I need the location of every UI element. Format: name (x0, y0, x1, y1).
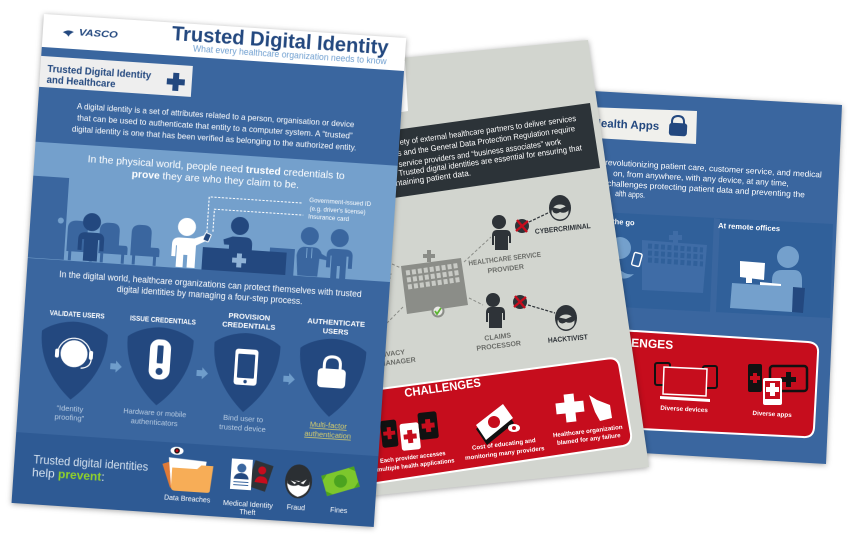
panel: dark intro text: s and the General Data Protection Regulation require (397, 124, 576, 158)
label: healthcare organization blamed (553, 424, 623, 447)
label: medical identity theft: Medical Identity (223, 500, 274, 510)
label: cybercriminal: CYBERCRIMINAL (534, 221, 592, 236)
body text: apps intro: revolutionizing patient care, customer service, and medical (605, 158, 822, 179)
icon: watching eye (170, 446, 184, 455)
section heading: health apps (560, 106, 697, 144)
icon: hospital building (401, 250, 468, 318)
labels: credentials: Insurance card (308, 213, 349, 223)
arrow: step 3 to 4 (283, 373, 295, 385)
illustration: doctor (295, 226, 329, 277)
label: hacktivist: HACKTIVIST (547, 332, 589, 345)
body text: apps intro (605, 158, 822, 200)
label: claims processor (476, 332, 521, 353)
icon: diverse devices (655, 363, 717, 402)
label: healthcare organization blamed: blamed for any failure (557, 432, 622, 447)
illustration: reception desk (201, 247, 287, 275)
panel: dark intro text: service providers and “business associates” work (398, 137, 562, 169)
label: diverse devices: Diverse devices (660, 405, 709, 414)
icon: folder data breaches (161, 457, 214, 493)
step 4: authenticate users: authentication (304, 429, 351, 441)
label: claims processor: PROCESSOR (476, 340, 521, 353)
panel: physical world (28, 142, 398, 282)
icon: claims processor person (486, 293, 505, 328)
icon: fraud mask (284, 464, 313, 499)
step 4: authenticate users: Multi-factor (310, 420, 348, 431)
label: diverse apps: Diverse apps (752, 410, 792, 419)
panel: access scenarios (600, 212, 833, 318)
page 3: health apps sheet (540, 88, 842, 464)
label: privacy manager: PRIVACY (374, 349, 406, 360)
icon: multiple phones (379, 411, 440, 453)
icon: mobile user (609, 237, 642, 279)
icon: hospital (642, 231, 707, 293)
icon: money fines (321, 466, 360, 496)
illustration: door (28, 176, 69, 260)
page 2: healthcare partners sheet (350, 40, 649, 498)
arrow: step 1 to 2 (110, 360, 122, 373)
icon: cybercriminal mask (549, 195, 571, 221)
labels: credentials: (e.g. driver's license) (309, 206, 366, 216)
label: privacy manager: MANAGER (379, 357, 416, 368)
illustration: side cabinet (268, 247, 295, 276)
dashed callouts to credentials (207, 197, 304, 239)
label: fines: Fines (330, 507, 348, 515)
icon: money cost (476, 404, 520, 445)
section heading: health apps: Health Apps (592, 118, 659, 133)
body text: digital identity definition: A digital identity is a set of attributes related to a person, organisation or device (77, 101, 355, 129)
step 2: issue credentials: ISSUE CREDENTIALS (130, 313, 196, 327)
section heading: trusted digital identity and healthcare (39, 56, 193, 97)
arrow: step 2 to 3 (196, 367, 208, 380)
text: help prevent (32, 452, 149, 487)
icon: credential card (203, 232, 211, 242)
label: healthcare organization blamed: Healthcare organization (553, 424, 623, 439)
text: help prevent: Trusted digital identities (33, 452, 149, 474)
step 3: provision credentials: PROVISION (228, 311, 270, 323)
icon: mobile device (233, 348, 259, 386)
icon: hacktivist mask (555, 305, 577, 331)
section heading: trusted digital identity and healthcare: and Healthcare (46, 74, 116, 90)
heading: physical world: In the physical world, people need trusted credentials to (87, 154, 345, 182)
step 3: provision credentials (209, 310, 283, 435)
step 2: issue credentials: Hardware or mobile (123, 406, 187, 419)
heading: challenges: CHALLENGES (590, 334, 674, 352)
scenario label: on the go: the go (612, 217, 635, 227)
body text: apps intro: challenges protecting patient data and preventing the (607, 179, 806, 199)
label: healthcare service provider: PROVIDER (487, 264, 524, 275)
illustration: second visitor (325, 228, 354, 279)
label: cost of educating: monitoring many providers (465, 445, 546, 462)
panel: challenges red box (apps) (540, 325, 818, 437)
subtitle: What every healthcare organization needs to know (193, 43, 387, 66)
illustration: patient presenting credential (171, 217, 209, 269)
icon: headset (54, 337, 94, 369)
step 4: authenticate users: AUTHENTICATE (307, 316, 365, 329)
panel: dark intro text (380, 103, 600, 200)
step 4: authenticate users (294, 316, 368, 441)
label: privacy manager (374, 349, 416, 368)
title: Trusted Digital Identity (171, 23, 390, 59)
text: help prevent: help prevent: (32, 465, 105, 484)
step 4: authenticate users: USERS (322, 326, 349, 337)
panel: challenges red box (partners) (350, 358, 631, 487)
label: claims processor: CLAIMS (484, 332, 512, 343)
icon: medical identity cards (230, 458, 274, 492)
body text: apps intro: on, from anywhere, with any device, at any time, (613, 169, 789, 188)
label: each provider (377, 450, 456, 474)
panel: prevent band (12, 432, 378, 527)
icon: healthcare service provider person (492, 215, 511, 250)
label: healthcare service provider (468, 252, 542, 275)
step 1: validate users: proofing” (54, 412, 85, 423)
label: each provider: multiple health applications (377, 457, 456, 474)
page 1: trusted digital identity sheet (12, 14, 406, 527)
panel: dark intro text: Trusted digital identities are essential for ensuring that (398, 143, 583, 178)
body text: digital identity definition (72, 101, 358, 152)
header band (42, 14, 406, 71)
icon: remote office worker (730, 246, 805, 313)
body text: digital identity definition: that can be used to authenticate that entity to a computer system. A “trusted” (77, 112, 353, 141)
icon: padlock (317, 356, 347, 389)
illustration: waiting chairs (66, 220, 161, 266)
text block: digital world: digital identities by managing a four-step process. (117, 284, 303, 306)
panel: dark intro text: ntaining patient data. (395, 168, 472, 188)
step 2: issue credentials: authenticators (130, 416, 178, 428)
text block: digital world: In the digital world, healthcare organizations can protect themselves with trusted (59, 269, 362, 299)
label: cost of educating (465, 437, 546, 462)
labels: credentials: Government-issued ID (309, 197, 372, 208)
logo: vasco: VASCO (78, 27, 119, 41)
illustration: seated patient (77, 212, 106, 262)
section heading: trusted digital identity and healthcare: Trusted Digital Identity (47, 63, 152, 82)
step 1: validate users (36, 308, 109, 424)
scenario label: at remote offices: At remote offices (718, 221, 780, 233)
icon: hardware token (148, 339, 172, 380)
label: cost of educating: Cost of educating and (472, 437, 536, 452)
illustration: receptionist (223, 216, 254, 251)
threat links blocked (513, 212, 555, 313)
step 3: provision credentials: Bind user to (223, 413, 263, 424)
label: data breaches: Data Breaches (164, 495, 211, 505)
panel: dark intro text: ety of external healthcare partners to deliver services (399, 114, 577, 147)
icon: plus and pointing hand (555, 393, 612, 423)
heading: challenges: CHALLENGES (403, 375, 482, 400)
fragment label: left node: T (387, 273, 393, 281)
heading: physical world (86, 154, 345, 194)
step 3: provision credentials: trusted device (219, 422, 266, 434)
step 2: issue credentials (122, 313, 196, 429)
step 3: provision credentials: CREDENTIALS (222, 319, 276, 332)
step 1: validate users: VALIDATE USERS (49, 308, 105, 321)
icon: medical plus (166, 72, 185, 91)
icon: diverse apps (748, 364, 807, 405)
heading: physical world: prove they are who they claim to be. (131, 169, 299, 191)
network connector lines (387, 237, 491, 323)
label: each provider: Each provider accesses (380, 450, 447, 465)
step 1: validate users: “Identity (56, 403, 84, 414)
logo: vasco (62, 26, 119, 41)
body text: digital identity definition: digital identity is one that has been verified as belonging to the authorized entity. (72, 124, 357, 152)
white section box sliver (395, 61, 408, 113)
label: fraud: Fraud (286, 504, 305, 512)
label: medical identity theft (222, 500, 274, 518)
label: medical identity theft: Theft (239, 509, 256, 517)
label: healthcare service provider: HEALTHCARE SERVICE (468, 252, 542, 267)
body text: apps intro: alth apps. (615, 189, 645, 200)
labels: credentials (308, 197, 372, 225)
